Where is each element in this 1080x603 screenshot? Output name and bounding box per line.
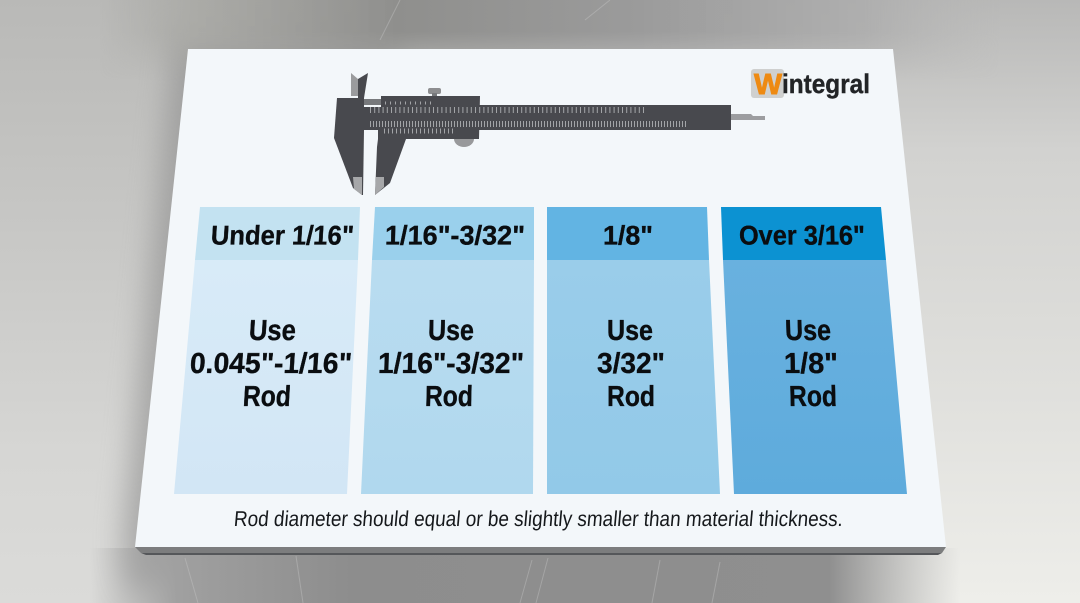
header label: 1/16"-3/32" <box>385 221 525 250</box>
recommendation text: Rod <box>789 381 837 413</box>
panel: over 3/16 <box>721 207 907 494</box>
column header <box>195 207 360 260</box>
column header <box>372 207 534 260</box>
recommendation text: Rod <box>607 381 655 413</box>
logo: Wintegral: integral <box>782 69 870 99</box>
panel: 1/16 to 3/32 <box>361 207 534 494</box>
recommendation text: 1/16"-3/32" <box>378 348 524 380</box>
footnote: Rod diameter should equal or be slightly smaller than material thickness. <box>233 507 844 531</box>
column body <box>723 260 907 494</box>
recommendation text: Use <box>248 315 297 347</box>
logo: Wintegral <box>751 69 870 101</box>
recommendation text: 1/8" <box>784 348 838 380</box>
column header <box>547 207 709 260</box>
column header <box>721 207 886 260</box>
recommendation text <box>597 315 665 413</box>
recommendation text: Use <box>428 315 474 347</box>
recommendation text: Rod <box>242 381 292 413</box>
recommendation text <box>784 315 838 413</box>
header label: Under 1/16" <box>210 221 355 250</box>
icon: vernier caliper <box>334 73 765 195</box>
column body <box>547 260 720 494</box>
white board <box>135 49 946 555</box>
header label: 1/8" <box>603 220 653 250</box>
recommendation text <box>189 315 353 413</box>
recommendation text: 3/32" <box>597 348 665 380</box>
recommendation text <box>378 315 524 413</box>
recommendation text: Use <box>785 315 831 347</box>
recommendation text: Use <box>607 315 653 347</box>
column body <box>174 260 358 494</box>
panel: under 1/16 <box>174 207 360 494</box>
column body <box>361 260 534 494</box>
logo: Wintegral: W <box>754 69 783 101</box>
header label: Over 3/16" <box>739 221 865 250</box>
panel: 1/8 <box>547 207 720 494</box>
recommendation text: 0.045"-1/16" <box>189 348 353 380</box>
recommendation text: Rod <box>425 381 473 413</box>
